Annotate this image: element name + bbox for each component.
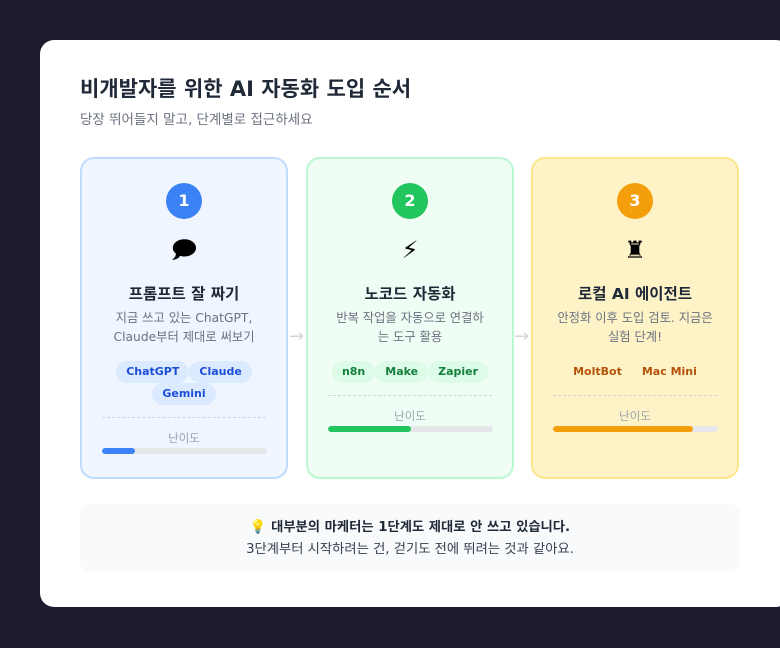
step 1 desc [113, 311, 255, 344]
badge 2 [392, 183, 428, 219]
step 3 desc: 안정화 이후 도입 검토. 지금은 [557, 311, 713, 325]
panel: step 2 [306, 157, 514, 479]
step 3 desc: 실험 단계! [608, 330, 662, 344]
step 1 desc: Claude부터 제대로 써보기 [113, 330, 255, 344]
step 2 title: 노코드 자동화 [365, 285, 455, 303]
step 2 desc: 는 도구 활용 [378, 330, 442, 344]
step 1 tags [116, 361, 252, 405]
step 2 tags: Zapier [438, 365, 478, 378]
step 1 tags: Gemini [162, 387, 206, 400]
callout note: 3단계부터 시작하려는 건, 걷기도 전에 뛰려는 것과 같아요. [246, 542, 574, 557]
badge 3: 3 [629, 191, 641, 210]
difficulty label: 난이도 [619, 409, 651, 423]
badge 1: 1 [178, 191, 190, 210]
callout note: 💡 대부분의 마케터는 1단계도 제대로 안 쓰고 있습니다. [250, 520, 570, 535]
step 3 tags: Mac Mini [642, 365, 697, 378]
step 3 desc [557, 311, 713, 344]
difficulty bar 2 [328, 426, 493, 432]
step 1 tags: ChatGPT [126, 365, 179, 378]
difficulty label: 난이도 [394, 409, 426, 423]
badge 1 [166, 183, 202, 219]
difficulty label: 난이도 [168, 431, 200, 445]
panel: step 1 [80, 157, 288, 479]
arrow: → [514, 326, 529, 347]
step 2 tags: n8n [342, 365, 365, 378]
step 1 title: 프롬프트 잘 짜기 [129, 285, 239, 303]
icon: memo: 🗩 [171, 236, 197, 264]
title: 비개발자를 위한 AI 자동화 도입 순서 [80, 77, 411, 101]
badge 2: 2 [404, 191, 416, 210]
subtitle: 당장 뛰어들지 말고, 단계별로 접근하세요 [80, 112, 313, 128]
step 1 desc: 지금 쓰고 있는 ChatGPT, [116, 311, 252, 325]
icon: lightning: ⚡︎ [402, 236, 418, 264]
step 3 title: 로컬 AI 에이전트 [578, 285, 692, 303]
badge 3 [617, 183, 653, 219]
step 2 tags: Make [385, 365, 418, 378]
step 2 desc [336, 311, 484, 344]
callout note [80, 504, 740, 572]
difficulty bar 1 [102, 448, 267, 454]
step 2 tags [332, 361, 488, 383]
panel: step 3 [531, 157, 739, 479]
step 2 desc: 반복 작업을 자동으로 연결하 [336, 311, 484, 325]
step 1 tags: Claude [199, 365, 242, 378]
difficulty bar 3 [553, 426, 718, 432]
step 3 tags: MoltBot [573, 365, 622, 378]
step 3 tags [573, 365, 697, 378]
arrow: → [289, 326, 304, 347]
icon: lobster: ♜ [624, 236, 646, 264]
